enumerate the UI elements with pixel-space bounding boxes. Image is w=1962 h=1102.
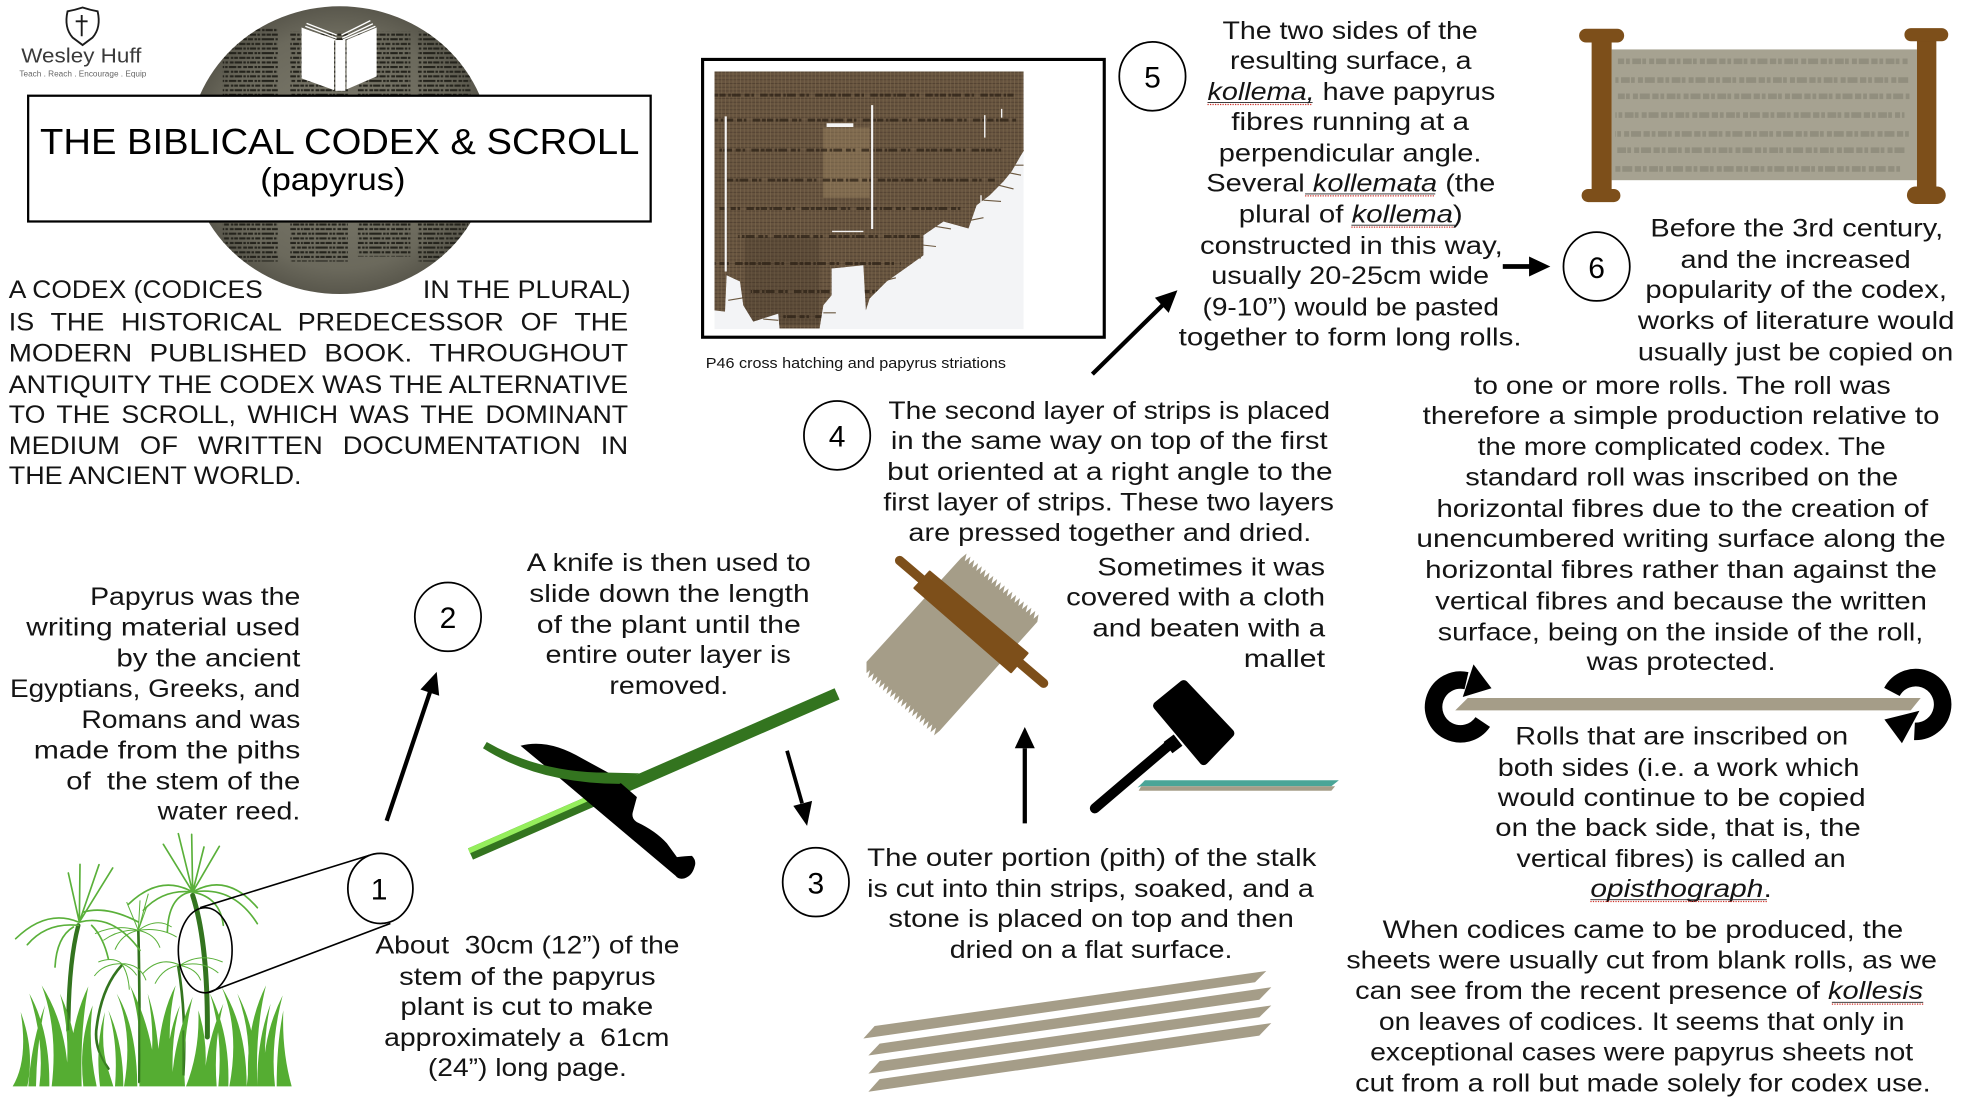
- intro text block: IN THE PLURAL): [423, 276, 631, 304]
- opisthograph text: opisthograph .: [1590, 875, 1772, 903]
- mallet note text: [1066, 554, 1325, 673]
- mallet note text: covered with a cloth: [1066, 584, 1325, 612]
- step 6 marker: 6: [1588, 252, 1605, 285]
- knife text: [527, 549, 811, 700]
- codices text: When codices came to be produced, the: [1383, 916, 1903, 944]
- illustration: mallet and plate: [1095, 684, 1339, 808]
- arrow: step 2 to step 3: [787, 751, 812, 826]
- step 6 text: surface, being on the inside of the roll,: [1438, 619, 1923, 647]
- cut stem cylinder: [178, 855, 390, 993]
- step 6 text: works of literature would: [1637, 307, 1954, 335]
- step 5 text: [1179, 17, 1522, 351]
- step 6 text: the more complicated codex. The: [1478, 433, 1886, 461]
- title box: [28, 96, 651, 221]
- codices text: can see from the recent presence of kollesis: [1355, 977, 1923, 1005]
- illustration: scroll: [1579, 28, 1948, 204]
- codices text: cut from a roll but made solely for codex use.: [1355, 1070, 1931, 1098]
- intro text block: MODERN PUBLISHED BOOK. THROUGHOUT: [9, 340, 628, 368]
- arrow: step 5 to step 6: [1503, 257, 1550, 277]
- step 3 marker: [783, 848, 849, 917]
- intro text block: THE ANCIENT WORLD.: [9, 462, 302, 490]
- step 5 text: usually 20-25cm wide: [1211, 262, 1489, 290]
- title box: (papyrus): [260, 162, 405, 197]
- mallet note text: Sometimes it was: [1097, 554, 1325, 582]
- knife text: entire outer layer is: [546, 641, 791, 669]
- step 4 text: in the same way on top of the first: [891, 427, 1328, 455]
- illustration: papyrus strips: [863, 971, 1271, 1092]
- opisthograph text: on the back side, that is, the: [1495, 814, 1861, 842]
- step 6 text: horizontal fibres due to the creation of: [1436, 495, 1928, 523]
- logo: Wesley Huff: [19, 8, 147, 78]
- step 5 text: together to form long rolls.: [1179, 323, 1522, 351]
- codices text: on leaves of codices. It seems that only in: [1379, 1008, 1904, 1036]
- step 5 text: The two sides of the: [1222, 17, 1478, 45]
- illustration: rolling pin over sheet: [867, 553, 1044, 735]
- step 6 text: Before the 3rd century,: [1650, 214, 1943, 242]
- step 4 text: The second layer of strips is placed: [888, 397, 1330, 425]
- icon: open book: [302, 21, 377, 91]
- step 5 text: constructed in this way,: [1200, 232, 1503, 260]
- codices text: [1346, 916, 1937, 1098]
- step 6 text: to one or more rolls. The roll was: [1474, 372, 1891, 400]
- stem cut text: plant is cut to make: [400, 993, 653, 1021]
- step 5 marker: 5: [1144, 62, 1161, 95]
- arrow: step 1 to step 2: [387, 672, 439, 821]
- mallet note text: and beaten with a: [1092, 614, 1325, 642]
- step 4 text: [883, 397, 1334, 547]
- step 6 text: unencumbered writing surface along the: [1416, 525, 1946, 553]
- papyrus description text: Papyrus was the: [90, 583, 300, 611]
- step 3 text: [867, 844, 1317, 964]
- knife text: removed.: [609, 672, 728, 700]
- step 1 marker: [348, 853, 413, 923]
- knife text: of the plant until the: [537, 611, 801, 639]
- knife text: slide down the length: [529, 580, 810, 608]
- stem cut text: [375, 931, 679, 1082]
- step 2 marker: [415, 582, 481, 651]
- intro text block: ANTIQUITY THE CODEX WAS THE ALTERNATIVE: [9, 371, 628, 399]
- step 6 text: horizontal fibres rather than against the: [1425, 556, 1937, 584]
- stem cut text: approximately a 61cm: [384, 1024, 669, 1052]
- arrow: step 3 to step 4: [1015, 727, 1035, 823]
- intro text block: A CODEX (CODICES: [9, 276, 263, 304]
- papyrus description text: Egyptians, Greeks, and: [10, 675, 300, 703]
- stem cut text: stem of the papyrus: [399, 963, 656, 991]
- papyrus description text: writing material used: [25, 614, 300, 642]
- step 5 text: resulting surface, a: [1230, 47, 1472, 75]
- logo: Wesley Huff: Teach . Reach . Encourage . Equip: [19, 69, 147, 78]
- step 2 marker: 2: [440, 602, 456, 635]
- step 6 text: was protected.: [1585, 648, 1776, 676]
- stem cut text: (24”) long page.: [428, 1054, 627, 1082]
- step 3 text: The outer portion (pith) of the stalk: [867, 844, 1317, 872]
- arrow: step 4 to step 5: [1092, 290, 1177, 374]
- step 4 text: are pressed together and dried.: [908, 519, 1311, 547]
- illustration: rolling strip with arrows: [1434, 664, 1943, 743]
- intro text block: MEDIUM OF WRITTEN DOCUMENTATION IN: [9, 432, 628, 460]
- opisthograph text: both sides (i.e. a work which: [1498, 754, 1859, 782]
- title box: THE BIBLICAL CODEX & SCROLL: [40, 121, 639, 162]
- step 5 text: (9-10”) would be pasted: [1202, 293, 1499, 321]
- step 5 text: kollema, have papyrus: [1207, 78, 1495, 106]
- step 4 text: but oriented at a right angle to the: [887, 458, 1333, 486]
- papyrus description text: by the ancient: [116, 644, 300, 672]
- step 5 marker: [1119, 42, 1186, 111]
- papyrus description text: of the stem of the: [66, 768, 300, 796]
- step 5 text: plural of kollema ): [1239, 201, 1463, 229]
- step 4 text: first layer of strips. These two layers: [883, 489, 1334, 517]
- step 5 text: fibres running at a: [1231, 108, 1469, 136]
- step 6 text: [1416, 214, 1954, 676]
- intro text block: IS THE HISTORICAL PREDECESSOR OF THE: [9, 308, 628, 336]
- logo: Wesley Huff: Wesley Huff: [21, 46, 142, 68]
- P46 photo frame: [703, 59, 1104, 337]
- opisthograph text: vertical fibres) is called an: [1517, 845, 1846, 873]
- intro text block: TO THE SCROLL, WHICH WAS THE DOMINANT: [9, 401, 628, 429]
- step 6 text: popularity of the codex,: [1645, 276, 1947, 304]
- step 3 text: dried on a flat surface.: [950, 936, 1233, 964]
- papyrus description text: Romans and was: [81, 706, 300, 734]
- mallet note text: mallet: [1244, 645, 1325, 673]
- step 4 marker: 4: [829, 421, 845, 454]
- step 3 text: is cut into thin strips, soaked, and a: [867, 875, 1314, 903]
- opisthograph text: [1495, 723, 1866, 903]
- step 4 marker: [804, 401, 870, 470]
- papyrus description text: [10, 583, 300, 826]
- step 6 text: therefore a simple production relative to: [1423, 402, 1939, 430]
- codices text: sheets were usually cut from blank rolls, as we: [1346, 946, 1937, 974]
- step 6 text: and the increased: [1680, 246, 1911, 274]
- codices text: exceptional cases were papyrus sheets not: [1370, 1038, 1913, 1066]
- step 6 marker: [1563, 232, 1630, 301]
- icon: papyrus plants: [13, 834, 292, 1086]
- step 5 text: Several kollemata (the: [1206, 169, 1495, 197]
- papyrus description text: water reed.: [157, 798, 300, 826]
- photo caption: P46 cross hatching and papyrus striations: [706, 356, 1006, 372]
- intro text block: [9, 276, 631, 490]
- step 1 marker: 1: [371, 874, 387, 907]
- step 6 text: usually just be copied on: [1638, 338, 1953, 366]
- step 5 text: perpendicular angle.: [1219, 139, 1482, 167]
- papyrus description text: made from the piths: [34, 736, 300, 764]
- step 6 text: vertical fibres and because the written: [1435, 587, 1927, 615]
- opisthograph text: Rolls that are inscribed on: [1515, 723, 1848, 751]
- opisthograph text: would continue to be copied: [1497, 784, 1866, 812]
- step 3 text: stone is placed on top and then: [888, 905, 1294, 933]
- step 3 marker: 3: [807, 867, 824, 900]
- stem cut text: About 30cm (12”) of the: [375, 931, 679, 959]
- manuscript disc behind title: [188, 6, 491, 294]
- illustration: knife peeling stalk: [468, 688, 840, 879]
- knife text: A knife is then used to: [527, 549, 811, 577]
- step 6 text: standard roll was inscribed on the: [1465, 463, 1898, 491]
